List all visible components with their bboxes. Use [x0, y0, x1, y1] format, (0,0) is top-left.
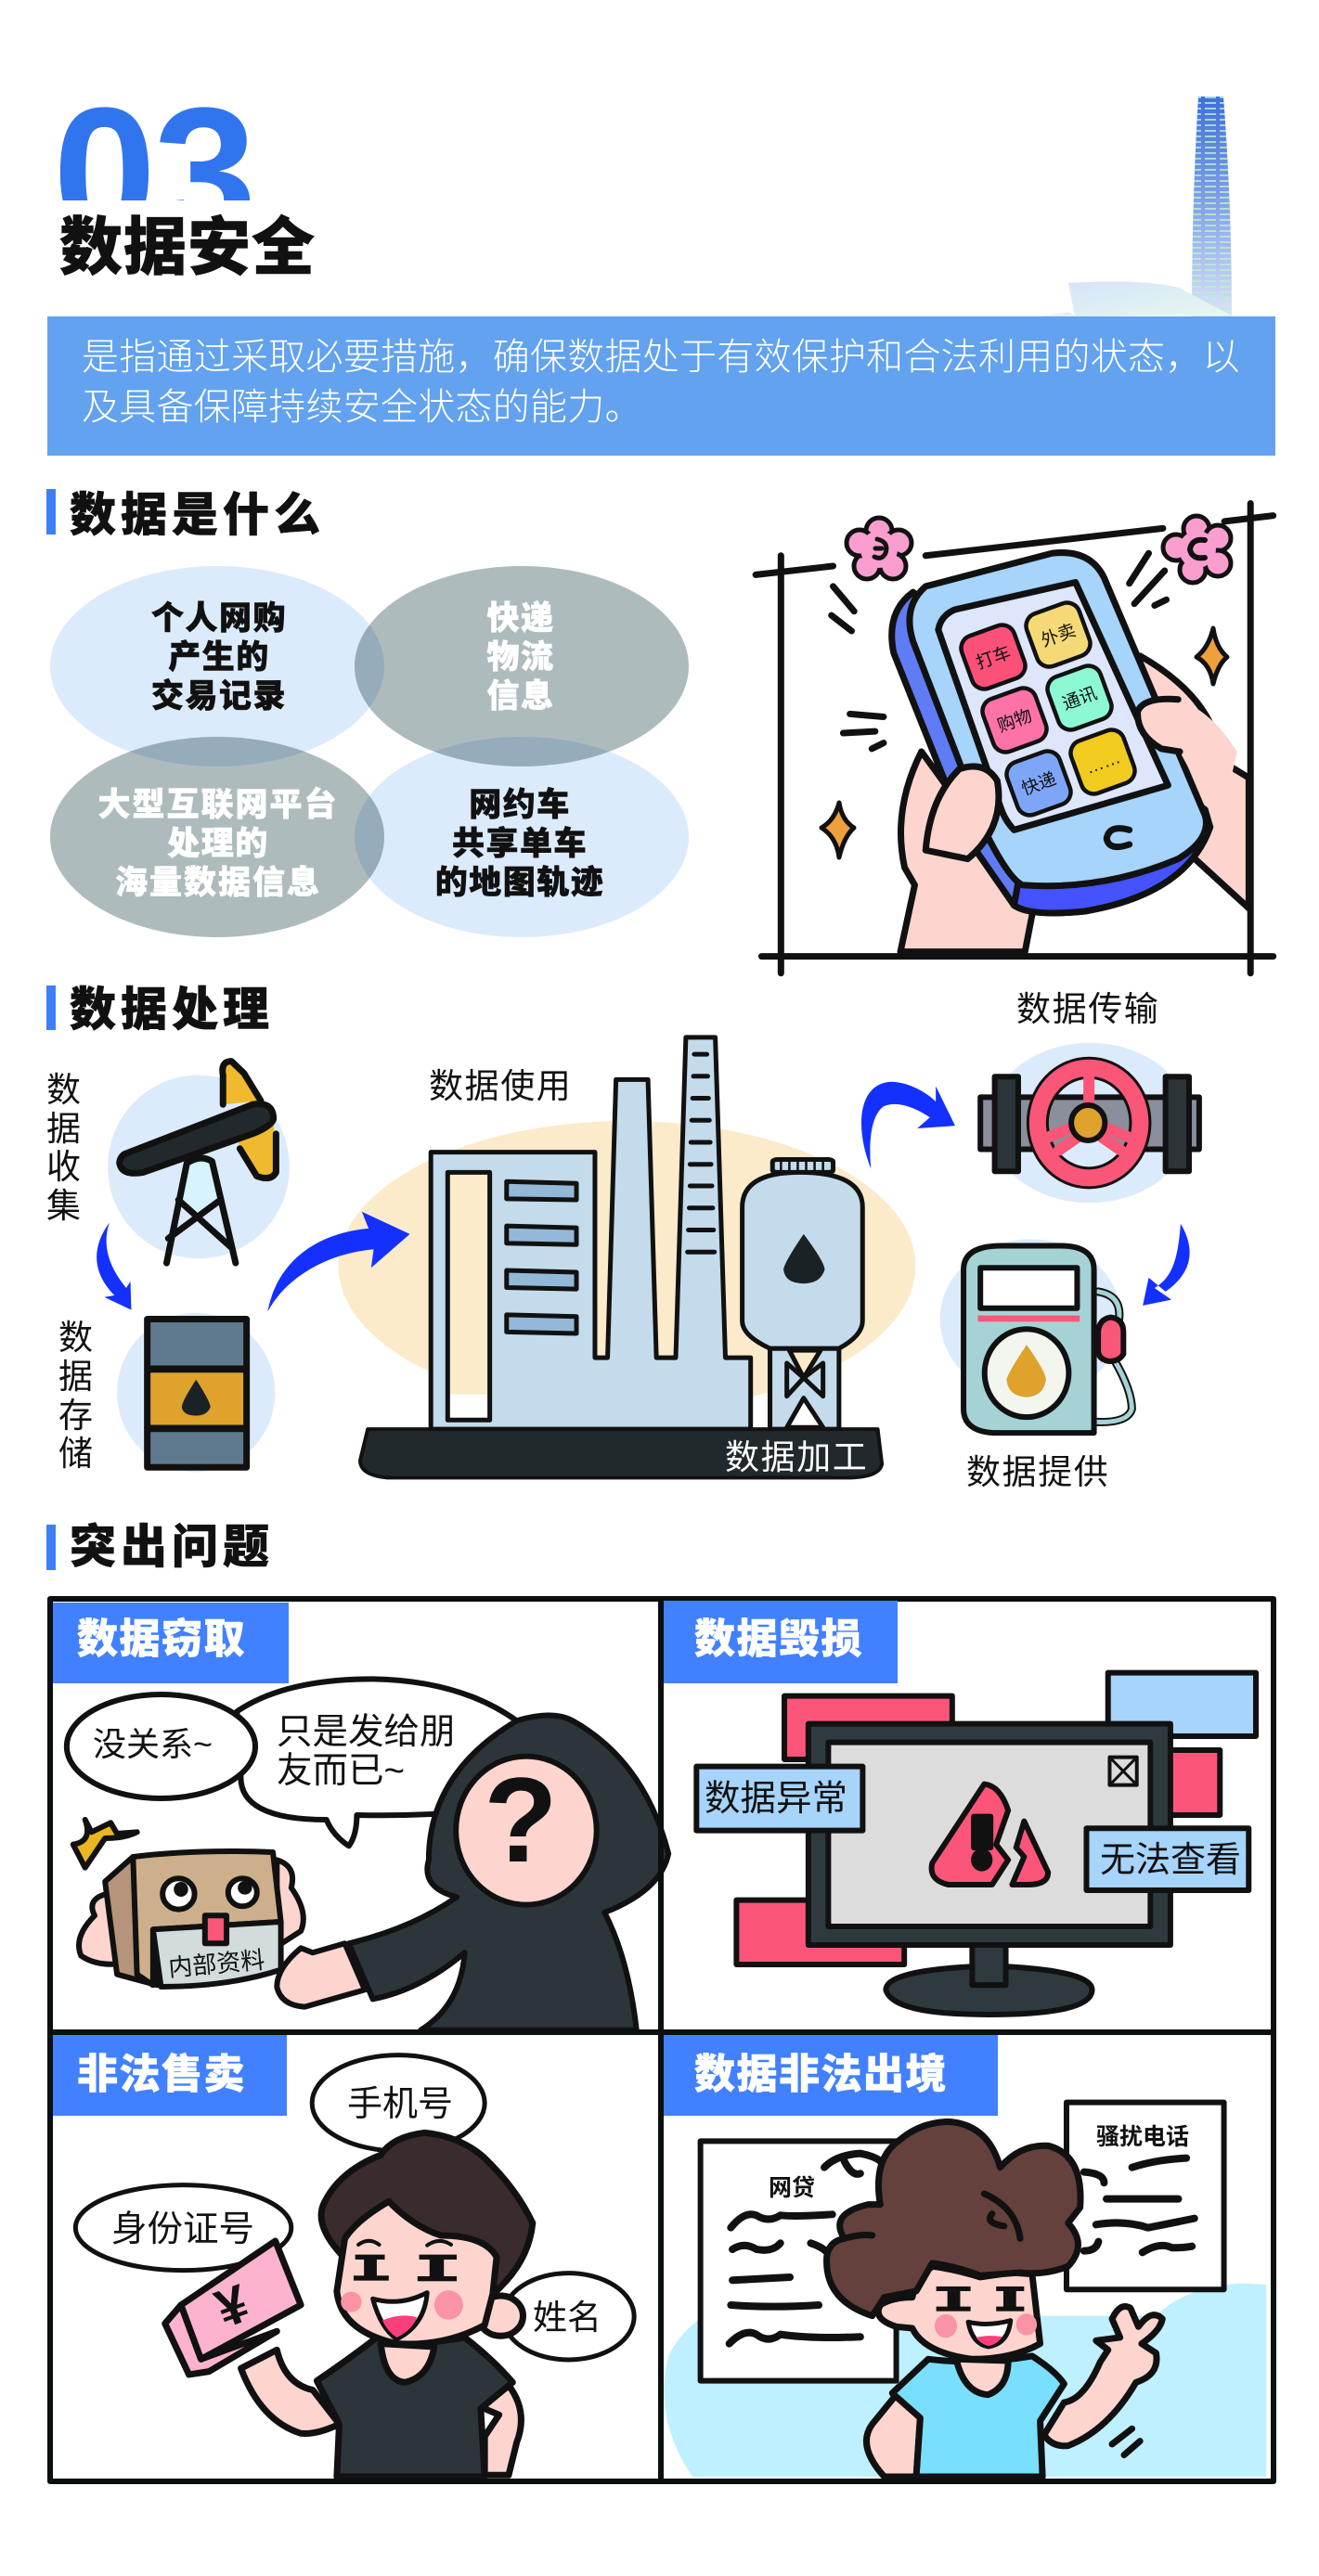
arrow: use to transfer: [861, 1082, 955, 1168]
banknote: [165, 2305, 277, 2375]
arrow: transfer to supply: [1143, 1224, 1190, 1306]
question mark: ?: [484, 1752, 558, 1887]
arrow: collect to storage: [97, 1223, 131, 1310]
overlapping data type circles: [50, 566, 689, 937]
circle labels: 大型互联网平台: [97, 786, 339, 823]
circle labels: 处理的: [167, 826, 269, 862]
app labels: 打车: [974, 642, 1014, 674]
man: hair and face: [321, 2132, 533, 2294]
process labels: 数据加工: [725, 1438, 868, 1476]
speech bubble large: [237, 1679, 517, 1846]
process labels: 数: [46, 1071, 81, 1109]
background skyscraper: [1038, 97, 1232, 316]
woman: arms and hand: [827, 2121, 1162, 2477]
app labels: 快递: [1019, 768, 1059, 800]
process labels: 收: [46, 1148, 81, 1186]
panel: illegal sale: [75, 2055, 634, 2477]
pink flower left: [847, 518, 912, 579]
woman: curly hair: [827, 2121, 1080, 2316]
comic panel frame: [50, 1599, 1274, 2481]
process labels: 数据提供: [966, 1453, 1109, 1491]
label text: 数据异常: [705, 1779, 847, 1819]
tag: illegal cross-border: 数据非法出境: [694, 2052, 948, 2097]
intro banner: 及具备保障持续安全状态的能力。: [82, 387, 642, 428]
document labels: 骚扰电话: [1096, 2124, 1189, 2150]
home button and thumbs: [925, 699, 1237, 859]
panel: illegal sale: 身份证号: [111, 2209, 254, 2249]
process labels: 数: [58, 1319, 93, 1357]
process labels: 储: [58, 1435, 93, 1473]
process labels: 数据传输: [1016, 990, 1159, 1028]
panel: data theft: [67, 1679, 668, 2030]
process labels: 据: [58, 1358, 93, 1396]
hooded figure: [349, 1715, 668, 2030]
tag: data destruction: 数据毁损: [694, 1616, 863, 1662]
tag: illegal sale: 非法售卖: [77, 2052, 246, 2097]
panel: illegal sale: 姓名: [533, 2299, 601, 2337]
process labels: 数据使用: [429, 1067, 572, 1105]
circle labels: 个人网购: [151, 600, 287, 637]
heading: what is data: 数据是什么: [70, 489, 325, 541]
app labels: 外卖: [1039, 620, 1079, 651]
panel: illegal cross-border data: 网贷: [769, 2175, 815, 2201]
icon: factory: [431, 1037, 751, 1429]
app labels: 通讯: [1060, 683, 1100, 715]
arrow: storage to use: [267, 1212, 410, 1312]
pink flower right: [1163, 516, 1231, 583]
circle labels: 网约车: [469, 786, 571, 823]
tag: illegal sale: [53, 2035, 287, 2116]
circle labels: 快递: [486, 600, 555, 637]
phone body: [892, 553, 1210, 913]
title: 数据安全: [59, 213, 316, 283]
arrows: [97, 1082, 1190, 1312]
circle labels: 产生的: [168, 639, 270, 676]
labels: 手机号: [347, 2085, 453, 2124]
label boxes: [696, 1767, 862, 1831]
process labels: [46, 990, 1159, 1491]
process labels: 集: [46, 1187, 81, 1225]
icon: oil barrel: [148, 1320, 247, 1467]
tag: illegal cross-border: [664, 2035, 998, 2116]
circle labels: [97, 600, 604, 901]
intro banner: [47, 316, 1275, 456]
circle labels: 物流: [486, 639, 555, 676]
frame lines: [756, 503, 1274, 973]
app labels: 购物: [995, 705, 1035, 737]
panel: data destruction: [696, 1673, 1256, 2015]
circle labels: 共享单车: [452, 825, 588, 862]
app labels: [974, 620, 1123, 800]
factory base: [360, 1429, 882, 1477]
panel: data destruction: 无法查看: [1100, 1841, 1241, 1880]
tag: data theft: [53, 1603, 289, 1683]
tag: data destruction: [664, 1601, 898, 1683]
woman: face: [878, 2266, 1041, 2359]
panel: illegal cross-border data: [664, 2103, 1266, 2477]
speech bubble small: [67, 1694, 255, 1798]
circle labels: 海量数据信息: [115, 864, 321, 901]
gold sparkles: [821, 628, 1227, 857]
bubble text: 没关系~: [93, 1725, 213, 1763]
panel: data theft: 只是发给朋: [277, 1712, 456, 1752]
panel: data theft: 友而已~: [277, 1751, 405, 1791]
panel: illegal sale: ¥: [208, 2273, 256, 2340]
scribbles: [730, 2154, 1195, 2344]
section number 03: 03: [53, 70, 253, 277]
man: shirt and arms: [165, 2132, 533, 2477]
warning triangle: [932, 1784, 1008, 1885]
box: [105, 1857, 157, 1985]
box ears: [79, 1892, 121, 1964]
illustration: phone in hands: [756, 503, 1274, 973]
heading: prominent issues: 突出问题: [70, 1521, 274, 1573]
tag: data theft: 数据窃取: [77, 1616, 246, 1662]
intro banner: 是指通过采取必要措施，确保数据处于有效保护和合法利用的状态，以: [82, 337, 1240, 378]
hands behind: [900, 656, 1248, 952]
pale backdrops: [108, 1043, 1191, 1472]
process labels: 存: [58, 1397, 93, 1435]
app labels: ……: [1083, 748, 1123, 779]
icon: valve wheel: [980, 1068, 1199, 1178]
process labels: 据: [46, 1110, 81, 1148]
spark: [73, 1820, 137, 1868]
hand: [277, 1943, 365, 2007]
icon: oil pump jack: [120, 1062, 278, 1263]
circle labels: 交易记录: [151, 677, 287, 715]
panel: data theft: 内部资料: [167, 1946, 265, 1982]
icon: storage tank: [743, 1160, 862, 1429]
circle labels: 信息: [486, 677, 555, 715]
monitor: [972, 1943, 1006, 1985]
app icons: [958, 599, 1138, 818]
circle labels: 的地图轨迹: [435, 865, 604, 901]
heading: data processing: 数据处理: [70, 984, 274, 1036]
process flow illustrations: [97, 1037, 1199, 1477]
icon: fuel pump: [963, 1245, 1131, 1433]
